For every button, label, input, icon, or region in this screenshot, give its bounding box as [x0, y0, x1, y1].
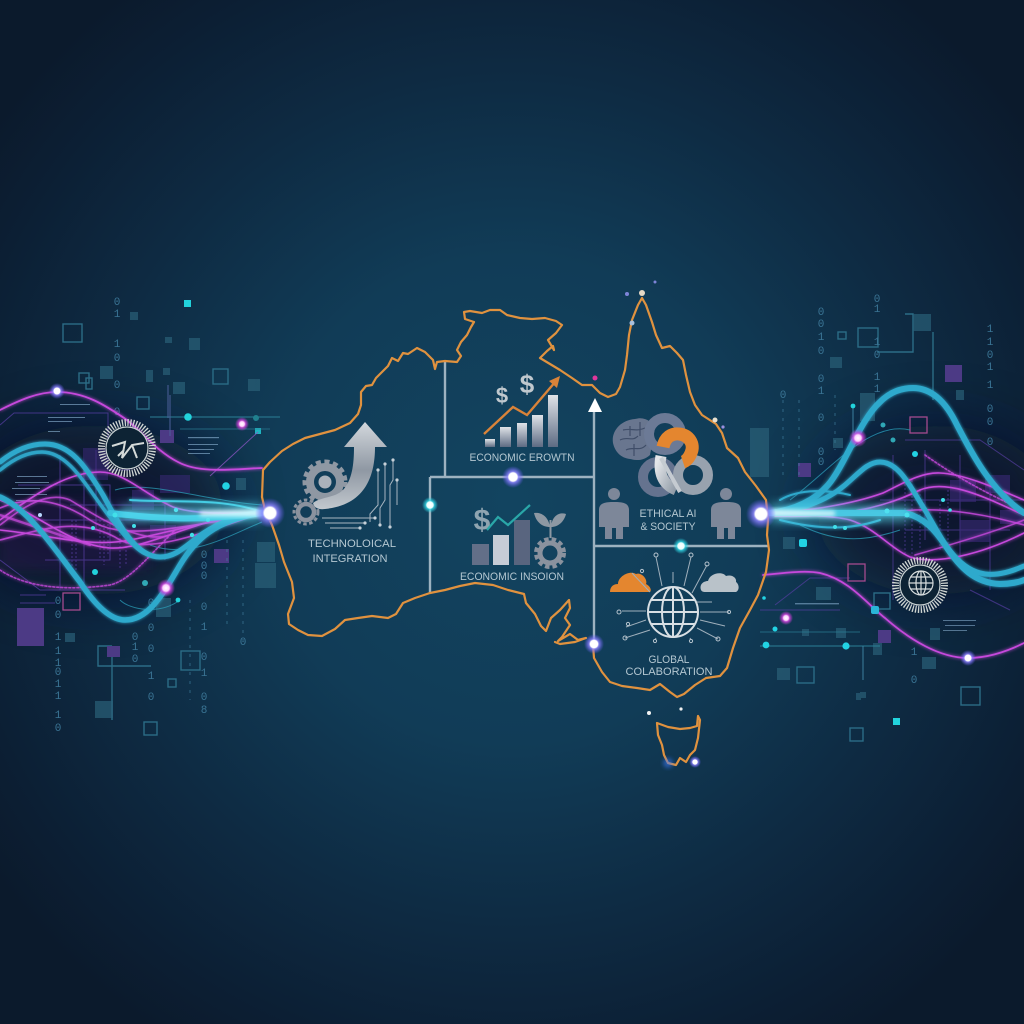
- binary code columns: 0: [55, 596, 61, 608]
- binary code columns: 0: [987, 417, 993, 429]
- binary code columns: 1: [148, 671, 155, 683]
- right stream convergence glow: [770, 504, 910, 522]
- right wave streams: [763, 388, 1024, 658]
- icon: circuit traces: [322, 458, 399, 530]
- binary code columns: 1: [874, 304, 881, 316]
- binary code columns: 1: [987, 324, 994, 336]
- binary code columns: 0: [148, 623, 154, 635]
- icon: gear: [536, 539, 564, 567]
- label: economic inclusion: ECONOMIC INSOION: [460, 571, 564, 583]
- binary code columns: 1: [55, 710, 62, 722]
- binary code columns: 1: [201, 668, 208, 680]
- binary code columns: 1: [874, 384, 881, 396]
- binary code columns: 0: [818, 346, 824, 358]
- label: global collaboration: GLOBAL: [648, 654, 690, 666]
- binary code columns: 0: [114, 407, 120, 419]
- binary code columns: 1: [987, 380, 994, 392]
- binary code columns: 0: [148, 598, 154, 610]
- right globe seal: [896, 560, 944, 610]
- binary code columns: 1: [55, 658, 62, 670]
- binary code columns: 0: [987, 350, 993, 362]
- binary code columns: 1: [55, 646, 62, 658]
- icon: bar chart: [485, 395, 558, 447]
- binary code columns: 0: [201, 550, 207, 562]
- binary code columns: 0: [818, 413, 824, 425]
- icon: sprout: [534, 513, 566, 538]
- binary code columns: 1: [987, 362, 994, 374]
- panel: economic growth: [470, 369, 575, 464]
- binary code columns: 0: [132, 654, 138, 666]
- right data squares: [750, 314, 980, 741]
- binary code columns: 0: [818, 374, 824, 386]
- binary code columns: 1: [132, 642, 139, 654]
- binary code columns: 0: [114, 297, 120, 309]
- right dark data field: [760, 425, 1024, 631]
- icon: large gear: [305, 462, 345, 502]
- binary code columns: 1: [818, 386, 825, 398]
- binary code columns: 0: [780, 390, 786, 402]
- panel divider lines: [430, 362, 768, 645]
- left wave streams: [0, 392, 262, 620]
- binary code columns: 0: [55, 610, 61, 622]
- binary code columns: 1: [55, 679, 62, 691]
- right cyan strands: [770, 388, 1024, 584]
- binary code columns: 0: [240, 637, 246, 649]
- icon: small gear: [294, 500, 318, 524]
- binary code columns: 0: [201, 571, 207, 583]
- left data squares: [17, 300, 276, 735]
- label: economic growth: ECONOMIC EROWTN: [470, 452, 575, 464]
- binary code columns: 1: [55, 691, 62, 703]
- panel: technological integration: [294, 422, 399, 565]
- icon: dollar signs: $: [520, 369, 535, 399]
- icon: growth arrow: [484, 376, 560, 434]
- icon: dollar signs: [496, 369, 535, 408]
- label: ethical AI and society: & SOCIETY: [640, 521, 696, 533]
- map accent dots: [592, 280, 725, 768]
- right magenta strands: [763, 455, 1024, 658]
- label: ethical AI and society: ETHICAL AI: [640, 508, 696, 520]
- binary code columns: 0: [911, 675, 917, 687]
- binary code columns: 0: [818, 307, 824, 319]
- binary code columns: 0: [874, 350, 880, 362]
- binary code columns: 1: [987, 337, 994, 349]
- binary code columns: 0: [148, 692, 154, 704]
- icon: gray cloud: [701, 573, 739, 592]
- icon: dollar and trend line: $: [474, 504, 491, 537]
- binary code columns: 1: [201, 622, 208, 634]
- panel: global collaboration: [610, 553, 739, 678]
- icon: orange cloud: [610, 573, 651, 592]
- binary code columns: 0: [55, 723, 61, 735]
- binary code columns: 0: [818, 319, 824, 331]
- icon: linked rings: [643, 418, 708, 492]
- binary code columns: 1: [114, 309, 121, 321]
- arrow head on divider: [588, 398, 602, 412]
- icon: rising arrow: [313, 422, 387, 509]
- binary code columns: 1: [911, 647, 918, 659]
- binary code columns: 0: [201, 602, 207, 614]
- icon: person right: [711, 488, 741, 539]
- left stream particles: [38, 508, 210, 586]
- left magenta strands: [0, 392, 262, 588]
- binary code columns: [55, 294, 994, 735]
- binary code columns: 8: [201, 705, 207, 717]
- left dark data field: [0, 404, 225, 603]
- binary code columns: 1: [874, 337, 881, 349]
- Tasmania: [657, 716, 700, 765]
- Australia outline: [262, 298, 769, 697]
- left gear seal: [102, 422, 152, 474]
- binary code columns: 0: [201, 561, 207, 573]
- right nodes: [762, 404, 976, 666]
- binary code columns: 0: [114, 353, 120, 365]
- binary code columns: 1: [818, 332, 825, 344]
- label: technological integration: TECHNOLOICAL: [308, 538, 396, 550]
- left cyan strands: [0, 444, 262, 620]
- binary code columns: 1: [55, 632, 62, 644]
- icon: network rays: [617, 553, 731, 643]
- binary code columns: 0: [987, 404, 993, 416]
- label: technological integration: INTEGRATION: [312, 553, 388, 565]
- panel: ethical AI and society: [599, 418, 741, 539]
- thin network lines: [115, 385, 910, 680]
- binary code columns: 0: [987, 437, 993, 449]
- icon: person left: [599, 488, 629, 539]
- icon: brain: [613, 418, 655, 460]
- glowing junction nodes: [255, 466, 776, 654]
- binary code columns: 0: [201, 652, 207, 664]
- left nodes: [49, 383, 259, 602]
- binary code columns: 1: [874, 372, 881, 384]
- binary code columns: 0: [148, 644, 154, 656]
- binary code columns: 0: [874, 294, 880, 306]
- binary code columns: 1: [114, 339, 121, 351]
- icon: bars: [472, 520, 530, 565]
- panel: economic inclusion: [460, 504, 566, 583]
- icon: dollar signs: $: [496, 383, 508, 408]
- icon: globe: [648, 587, 698, 637]
- binary code columns: 0: [132, 632, 138, 644]
- left stream convergence glow: [120, 504, 262, 522]
- binary code columns: 0: [114, 380, 120, 392]
- binary code columns: 0: [201, 692, 207, 704]
- right stream particles: [833, 422, 952, 530]
- binary code columns: 0: [818, 447, 824, 459]
- binary code columns: 0: [55, 667, 61, 679]
- label: global collaboration: COLABORATION: [626, 666, 713, 678]
- binary code columns: 0: [818, 457, 824, 469]
